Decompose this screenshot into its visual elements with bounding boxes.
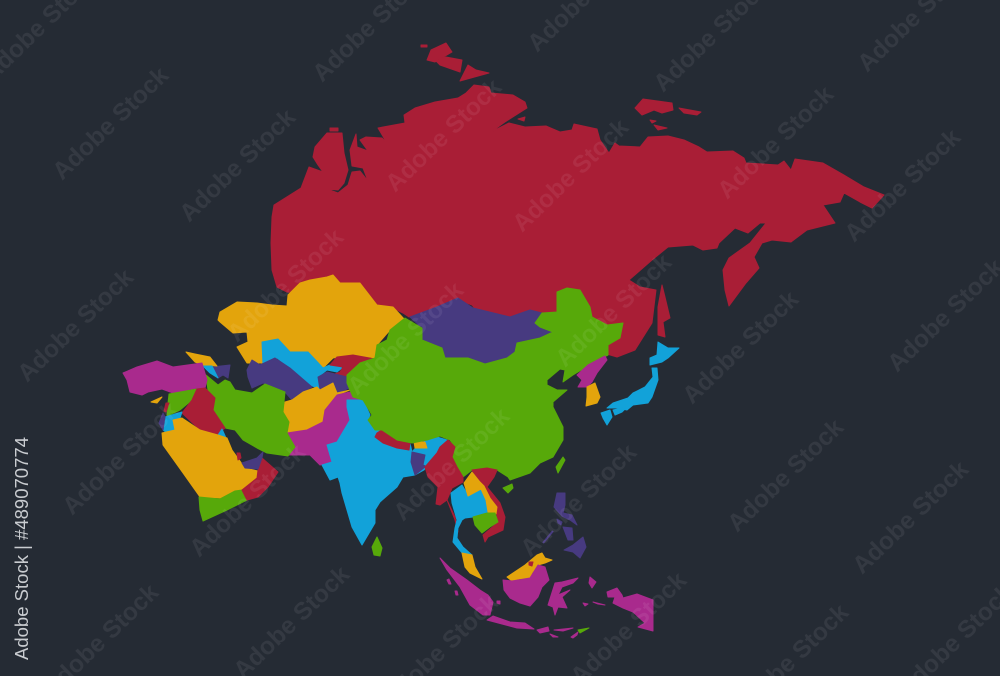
map of Asia <box>123 43 884 638</box>
watermark pattern: Adobe Stock <box>723 414 849 537</box>
watermark pattern: Adobe Stock <box>840 124 966 247</box>
country: Russia <box>271 43 884 357</box>
country: South Korea <box>586 383 600 406</box>
country: East Timor <box>578 628 589 633</box>
country: China <box>347 288 623 480</box>
country: North Korea <box>577 356 607 387</box>
country: Cambodia <box>473 513 498 533</box>
country: Qatar <box>237 453 241 460</box>
watermark pattern: Adobe Stock <box>185 439 311 562</box>
country: Syria <box>167 389 197 416</box>
country: Kuwait <box>218 429 226 438</box>
watermark pattern: Adobe Stock <box>48 62 174 185</box>
country: Mongolia <box>410 298 553 364</box>
country: Jordan <box>163 412 182 433</box>
country: UAE <box>242 452 263 469</box>
watermark pattern: Adobe Stock <box>678 286 804 409</box>
country: Armenia <box>203 366 218 378</box>
watermark pattern: Adobe Stock <box>389 403 515 526</box>
watermark pattern: Adobe Stock <box>713 81 839 204</box>
country: Bangladesh <box>411 452 430 477</box>
watermark pattern: Adobe Stock <box>223 224 349 347</box>
country: Laos <box>464 472 497 514</box>
watermark pattern: Adobe Stock <box>58 397 184 520</box>
watermark pattern: Adobe Stock <box>13 264 139 387</box>
country: Lebanon <box>164 403 169 412</box>
country: Tajikistan <box>318 372 352 393</box>
country: Pakistan <box>287 392 362 465</box>
country: Afghanistan <box>283 383 350 433</box>
country: Azerbaijan <box>212 365 230 378</box>
country: Philippines <box>543 493 586 558</box>
watermark pattern: Adobe Stock <box>508 114 634 237</box>
country: Nepal <box>375 429 410 450</box>
country: Saudi Arabia <box>162 418 258 498</box>
country: Japan <box>601 342 679 425</box>
country: Iran <box>206 375 295 456</box>
country: Georgia <box>186 352 217 366</box>
country: Turkey <box>123 361 207 395</box>
country: Malaysia (peninsula) <box>462 553 482 579</box>
island: Taiwan <box>556 457 565 473</box>
island: Sri Lanka <box>372 537 382 556</box>
stock id caption: Adobe Stock | #489070774 <box>11 437 32 660</box>
country: Brunei <box>529 562 533 566</box>
country: Indonesia <box>440 558 653 638</box>
watermark pattern: Adobe Stock <box>381 74 507 197</box>
island: Hainan <box>503 484 513 493</box>
watermark pattern: Adobe Stock <box>175 104 301 227</box>
country: Turkmenistan <box>247 358 312 400</box>
island: Cyprus <box>151 397 162 403</box>
watermark pattern: Adobe Stock <box>343 277 469 400</box>
country: Thailand <box>451 485 488 555</box>
country: Bhutan <box>414 442 427 448</box>
country: Vietnam <box>472 468 505 542</box>
country: Kazakhstan <box>218 275 405 368</box>
country: Malaysia (Borneo) <box>507 553 552 581</box>
country: Oman <box>242 458 278 500</box>
country: Kyrgyzstan <box>327 355 375 377</box>
country: Uzbekistan <box>262 339 342 389</box>
country: Israel <box>159 413 165 430</box>
watermark pattern: Adobe Stock <box>551 249 677 372</box>
country: Myanmar <box>425 440 463 532</box>
country: Yemen <box>199 490 247 521</box>
watermark pattern: Adobe Stock <box>516 439 642 562</box>
watermark pattern: Adobe Stock <box>848 456 974 579</box>
country: Iraq <box>182 388 225 435</box>
country: India <box>322 400 448 545</box>
